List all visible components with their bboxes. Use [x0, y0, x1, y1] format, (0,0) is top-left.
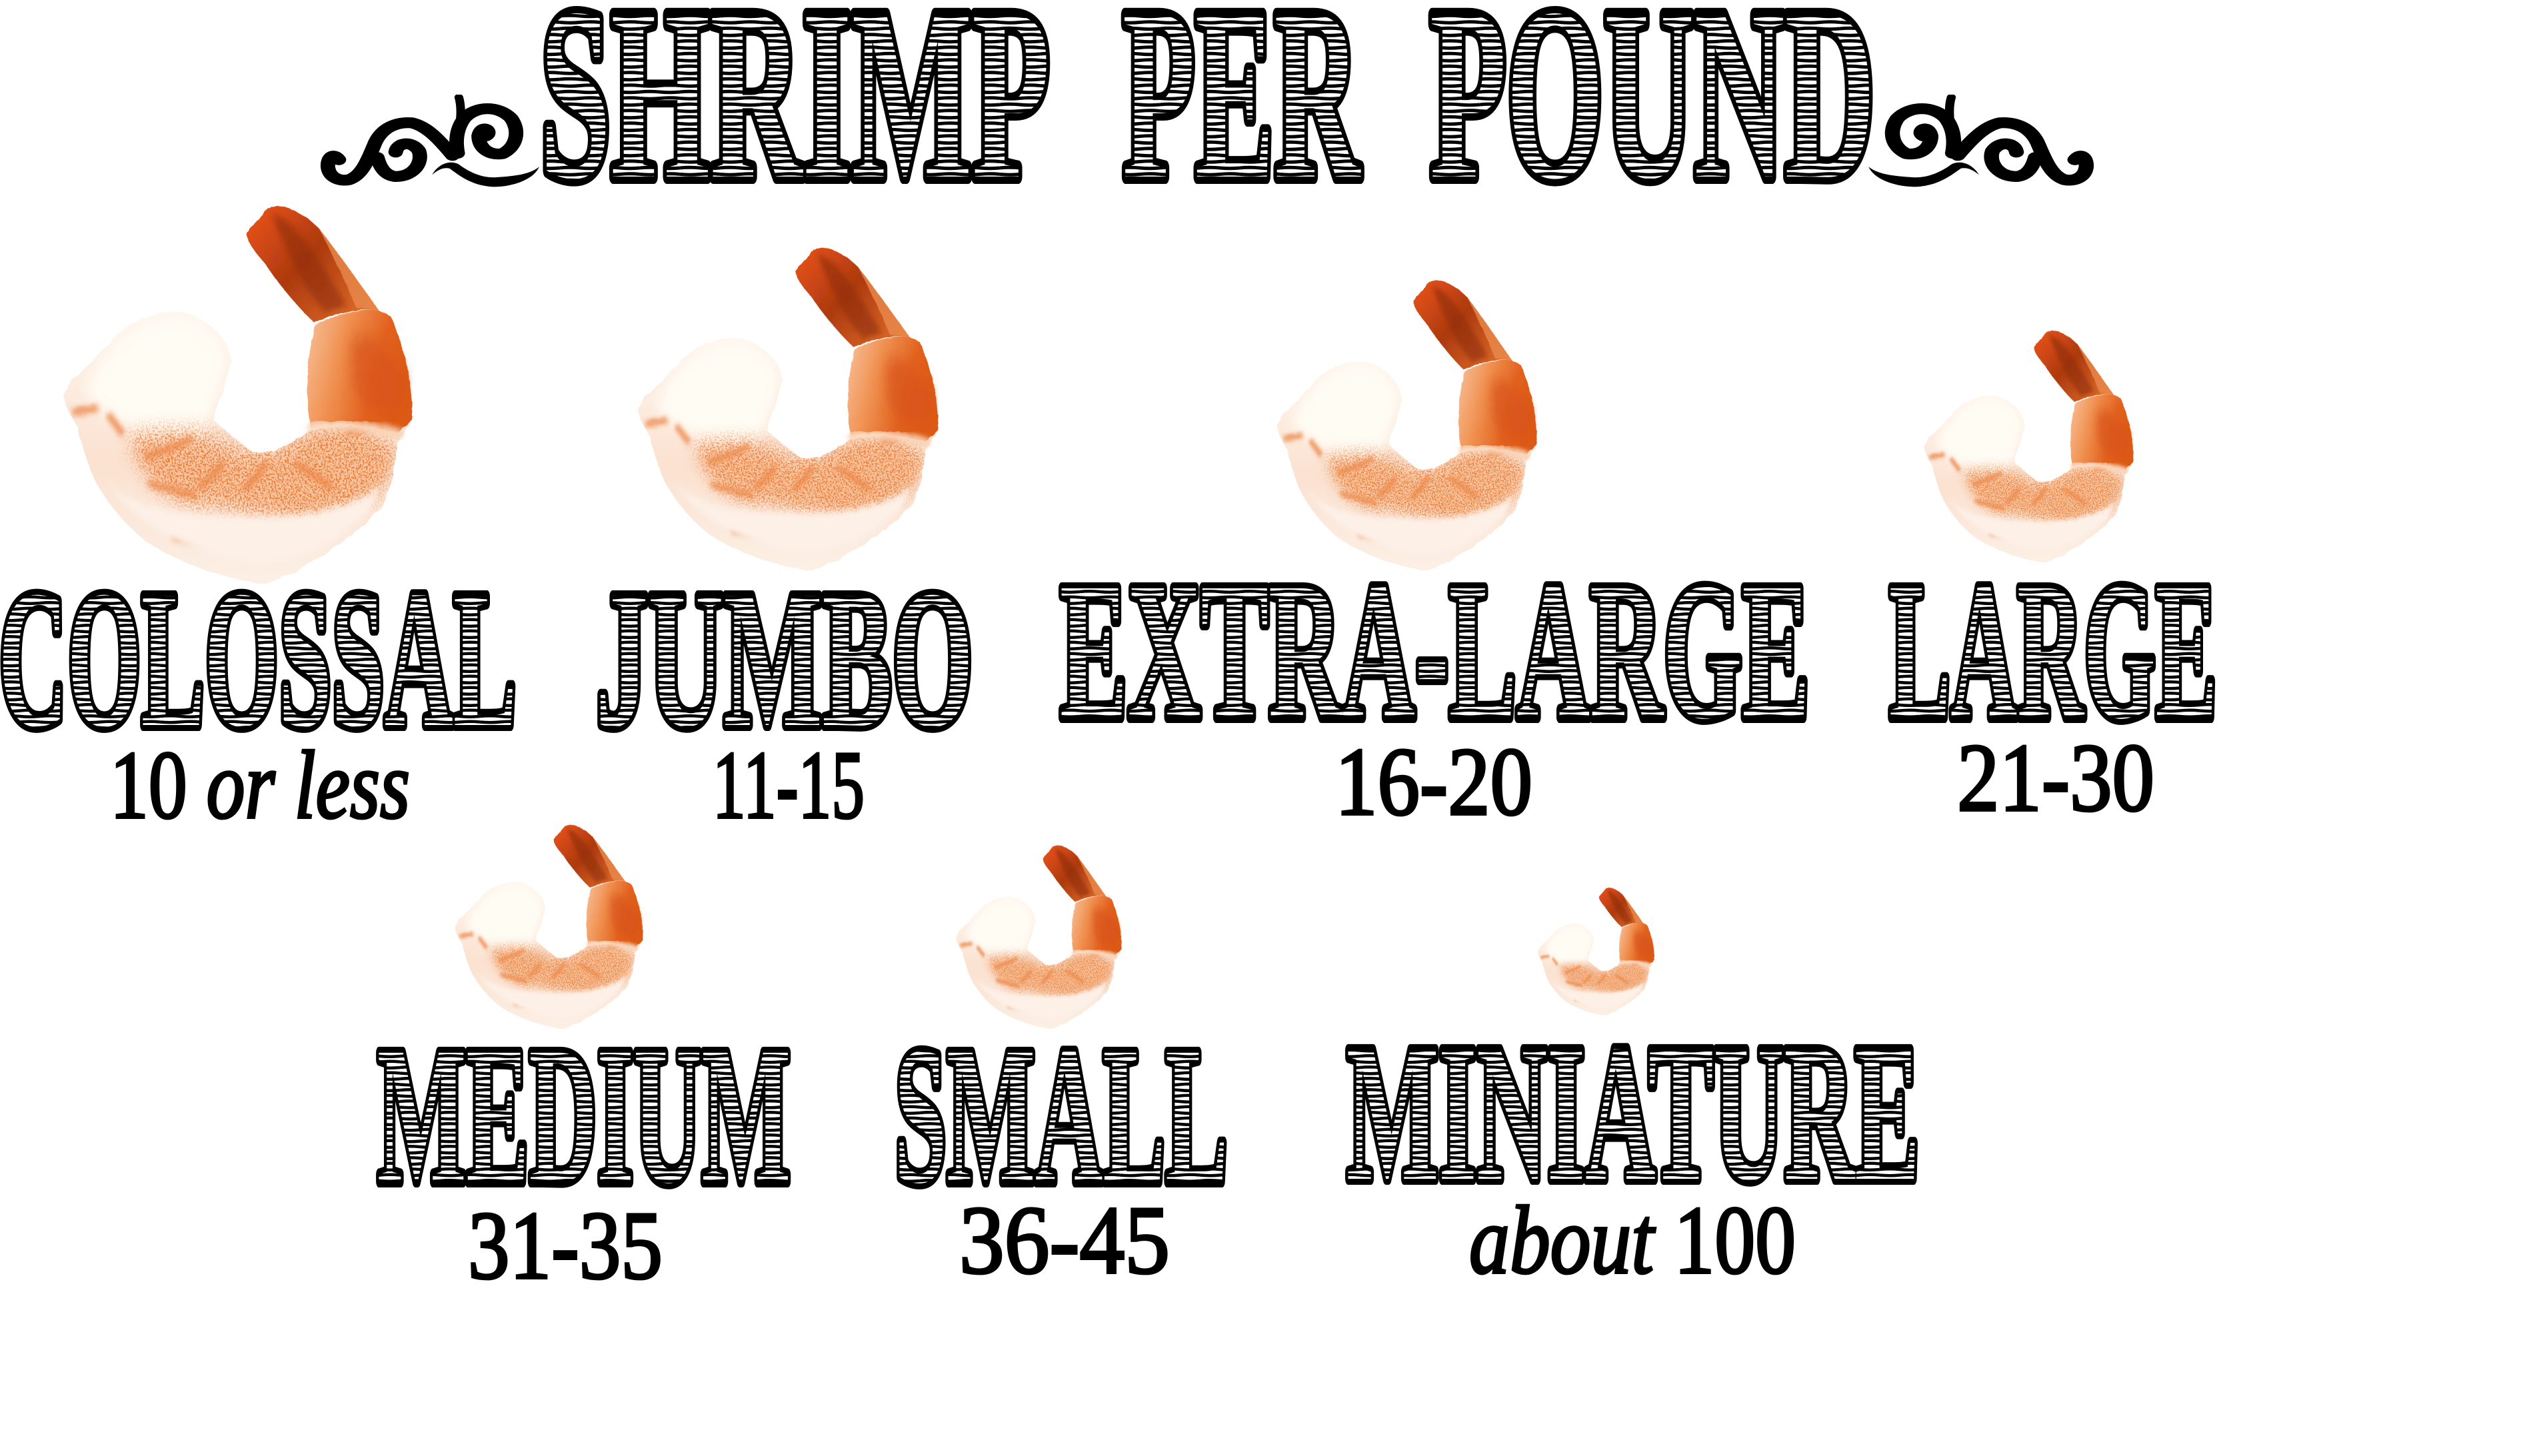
shrimp: extra-large: [1277, 281, 1537, 570]
item: extra-large: [1060, 281, 1810, 836]
count: 10 or less: 10 or less: [110, 731, 410, 839]
label: extra-large: EXTRA-LARGE: [1060, 542, 1810, 760]
text: MEDIUM: [377, 1006, 791, 1224]
label: jumbo: JUMBO: [596, 550, 973, 768]
count: 21-30: 21-30: [1957, 724, 2154, 832]
text: SMALL: [895, 1006, 1228, 1224]
item: jumbo: [596, 248, 973, 839]
ornament: right flourish: [1868, 97, 2086, 187]
item: large: [1889, 331, 2217, 832]
shrimp: medium: [455, 825, 643, 1029]
title: [328, 0, 2086, 231]
text: MINIATURE: [1346, 1004, 1920, 1221]
ornament: left flourish: [328, 97, 539, 187]
item: medium: [377, 825, 791, 1299]
shrimp: colossal: [64, 207, 413, 584]
item: small: [895, 846, 1228, 1294]
shrimp: miniature: [1538, 888, 1654, 1016]
item: colossal: [0, 207, 517, 839]
count: 31-35: 31-35: [468, 1191, 663, 1299]
shrimp: large: [1924, 331, 2134, 562]
shrimp: small: [956, 846, 1122, 1029]
shrimp: jumbo: [638, 248, 939, 570]
count: 11-15: 11-15: [713, 731, 865, 839]
count: 16-20: 16-20: [1335, 728, 1532, 836]
count: 36-45: 36-45: [959, 1186, 1170, 1294]
count: about 100: about 100: [1469, 1186, 1796, 1294]
text: COLOSSAL: [0, 550, 517, 768]
item: miniature: [1346, 888, 1920, 1294]
